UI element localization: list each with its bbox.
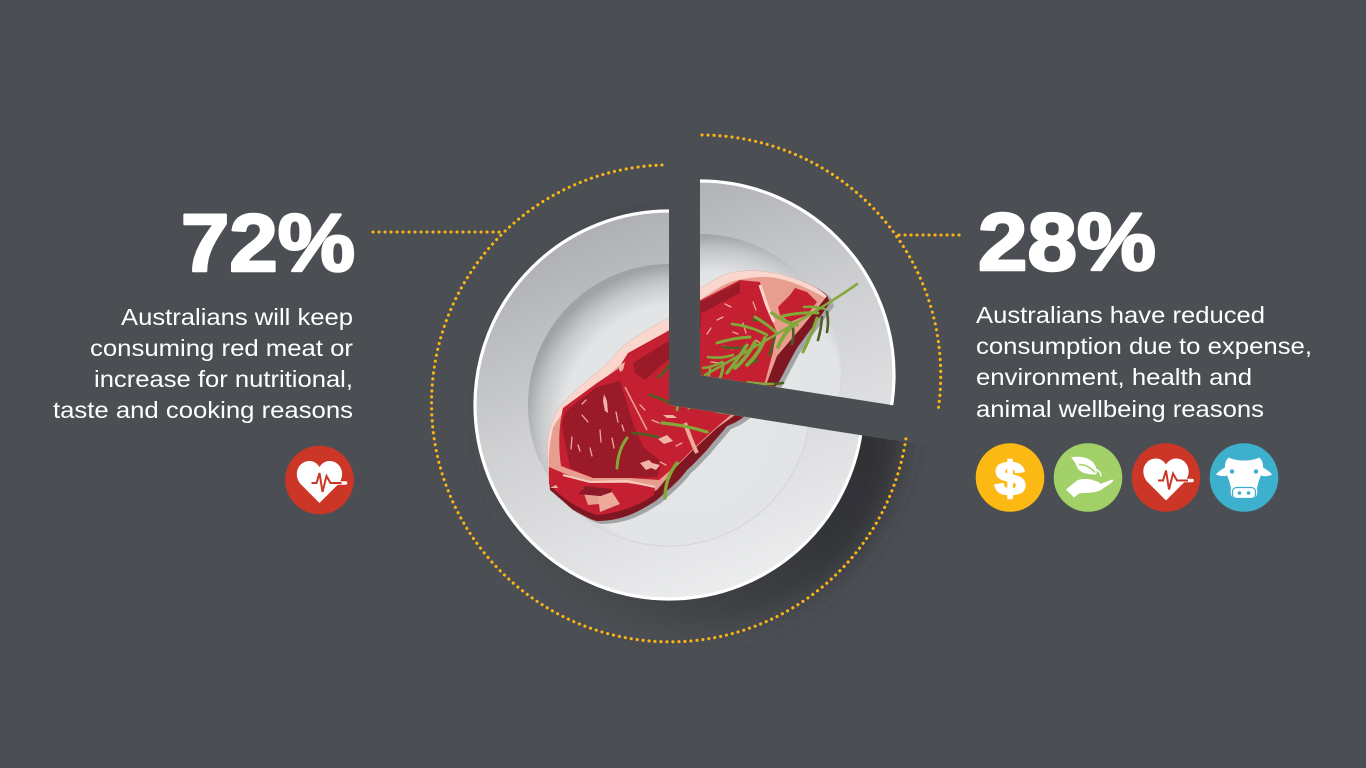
text block: 72% description: consuming red meat or — [90, 335, 353, 361]
text block: 28% description: Australians have reduced — [976, 302, 1265, 328]
connector: 28% — [899, 233, 962, 237]
plate: 28% wedge with steak — [700, 179, 896, 406]
heading: 72%: 72% — [181, 198, 355, 289]
text block: 72% description: taste and cooking reasons — [53, 397, 353, 423]
text block: 28% description: consumption due to expense, — [976, 333, 1312, 359]
text block: 72% description — [53, 304, 353, 423]
plate shadow — [612, 436, 909, 623]
heading: 28%: 28% — [978, 197, 1156, 288]
icon: dollar — [976, 443, 1044, 512]
text block: 28% description — [976, 302, 1312, 422]
dotted ring: 28% arc — [702, 135, 941, 411]
icon: heart — [1132, 443, 1200, 512]
text block: 28% description: animal wellbeing reasons — [976, 396, 1264, 422]
text block: 72% description: increase for nutritional, — [94, 366, 353, 392]
icon: dollar: $ — [995, 452, 1025, 504]
text block: 72% description: Australians will keep — [121, 304, 353, 330]
connector: 72% — [373, 230, 503, 234]
icon: hand and leaf — [1054, 443, 1122, 512]
icon: cow — [1210, 443, 1278, 512]
dotted ring: 72% arc — [432, 165, 906, 642]
plate: 72% section with steak — [475, 211, 863, 599]
text block: 28% description: environment, health and — [976, 364, 1252, 390]
icon: health heart (left) — [285, 446, 354, 514]
